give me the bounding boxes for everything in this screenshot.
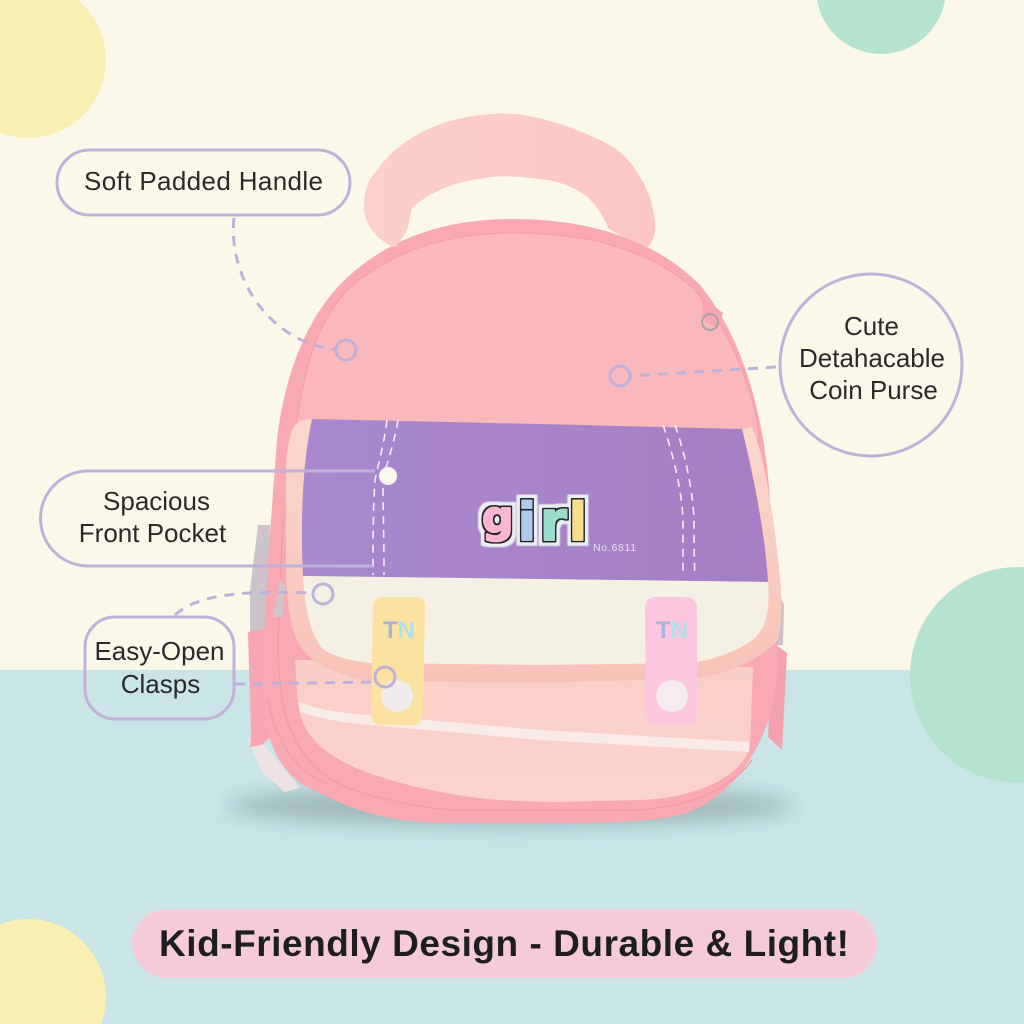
dashed leader — [233, 218, 336, 350]
white stripe — [299, 702, 749, 752]
logo text: r — [540, 490, 567, 553]
side mesh pocket left — [250, 525, 270, 634]
logo text: g — [482, 492, 514, 543]
purple flap section — [302, 419, 768, 582]
backpack ground shadow — [225, 786, 795, 826]
callout text: Soft Padded Handle — [84, 166, 323, 196]
target ring lower — [375, 667, 395, 687]
callout box — [85, 617, 234, 719]
clasp TN: TN — [656, 617, 688, 644]
clasp button — [656, 680, 688, 712]
target dot — [379, 467, 397, 485]
banner title: Kid-Friendly Design - Durable & Light! — [159, 923, 849, 964]
cream flap section — [303, 576, 769, 665]
clasp strap — [645, 597, 697, 725]
pink clasp — [645, 597, 697, 725]
callout: soft padded handle — [57, 150, 356, 360]
side tab left — [248, 628, 272, 747]
callout: coin purse — [610, 274, 962, 456]
callout text: Detahacable — [799, 343, 945, 373]
callout text: Cute — [844, 311, 899, 341]
dashed leader — [630, 367, 776, 376]
grey strip on body — [273, 580, 285, 617]
target ring — [336, 340, 356, 360]
callout text: Coin Purse — [809, 375, 938, 405]
white bottom strap — [247, 737, 300, 792]
callout text: Clasps — [121, 669, 200, 699]
backpack illustration — [247, 114, 787, 823]
front flap trim — [286, 419, 781, 683]
metal ring — [702, 314, 718, 330]
dashed leader lower — [235, 682, 375, 684]
callout outline — [41, 471, 375, 566]
banner pill — [132, 909, 877, 978]
decorative circle: yellow bottom left — [0, 919, 106, 1024]
callout text: Front Pocket — [79, 518, 227, 548]
dashed leader upper — [175, 592, 313, 615]
callout pill — [57, 150, 350, 215]
logo text: l — [569, 493, 587, 553]
yellow clasp — [371, 597, 425, 725]
side tab right — [768, 643, 787, 750]
clasp button — [381, 680, 413, 712]
callout text: Spacious — [103, 486, 210, 516]
decorative circle: yellow top left — [0, 0, 106, 138]
bottom banner — [132, 909, 877, 978]
callout: spacious front pocket — [41, 467, 397, 566]
target ring upper — [313, 584, 333, 604]
target ring — [610, 366, 630, 386]
upper panel — [295, 233, 760, 440]
background: cream upper area — [0, 0, 1024, 671]
callout text: Easy-Open — [94, 636, 225, 666]
left stitching — [373, 420, 398, 575]
background: blue lower area — [0, 670, 1024, 1024]
logo text: i — [518, 493, 536, 553]
decorative circle: mint top right — [816, 0, 946, 54]
model number: No.6811 — [593, 542, 637, 554]
clasp strap — [371, 597, 425, 725]
side mesh right — [770, 580, 784, 645]
ring tab — [702, 297, 723, 328]
callout circle — [780, 274, 962, 456]
right stitching — [663, 425, 695, 576]
callout: easy-open clasps — [85, 584, 395, 719]
inner body piping — [268, 520, 752, 810]
lower pocket — [295, 660, 753, 802]
decorative circle: mint right — [910, 567, 1024, 783]
backpack body — [262, 219, 778, 823]
padded handle — [364, 114, 655, 247]
clasp TN: TN — [383, 617, 415, 644]
